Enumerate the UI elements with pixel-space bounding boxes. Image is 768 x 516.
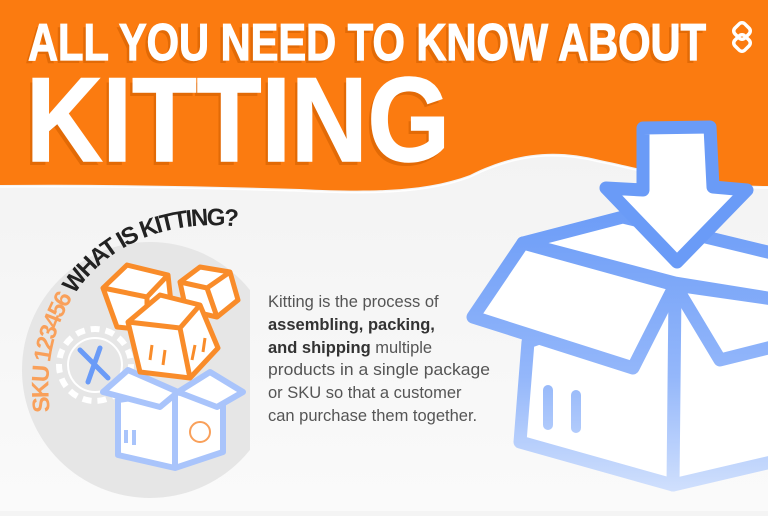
description text: and shipping multiple: [268, 339, 432, 357]
description text: [268, 293, 490, 425]
logo icon: [732, 21, 752, 53]
description text: or SKU so that a customer: [268, 384, 462, 402]
description text: Kitting is the process of: [268, 293, 439, 311]
header: orange wave banner: [0, 0, 768, 193]
description text: assembling, packing,: [268, 316, 435, 334]
description text: products in a single package: [268, 361, 490, 379]
big open box with arrow: [473, 127, 768, 485]
icon: open blue box: [103, 370, 243, 468]
icon: orange cubes: [103, 265, 238, 378]
title line 2: KITTING: [23, 57, 447, 191]
gray circle backdrop: [22, 242, 250, 498]
icon: gear with tools: [59, 329, 131, 401]
description text: can purchase them together.: [268, 407, 477, 425]
curved heading: SKU 123456 WHAT IS KITTING?: SKU 123456 WHAT IS KITTING?: [32, 208, 238, 412]
title line 2: KITTING: [26, 53, 450, 187]
